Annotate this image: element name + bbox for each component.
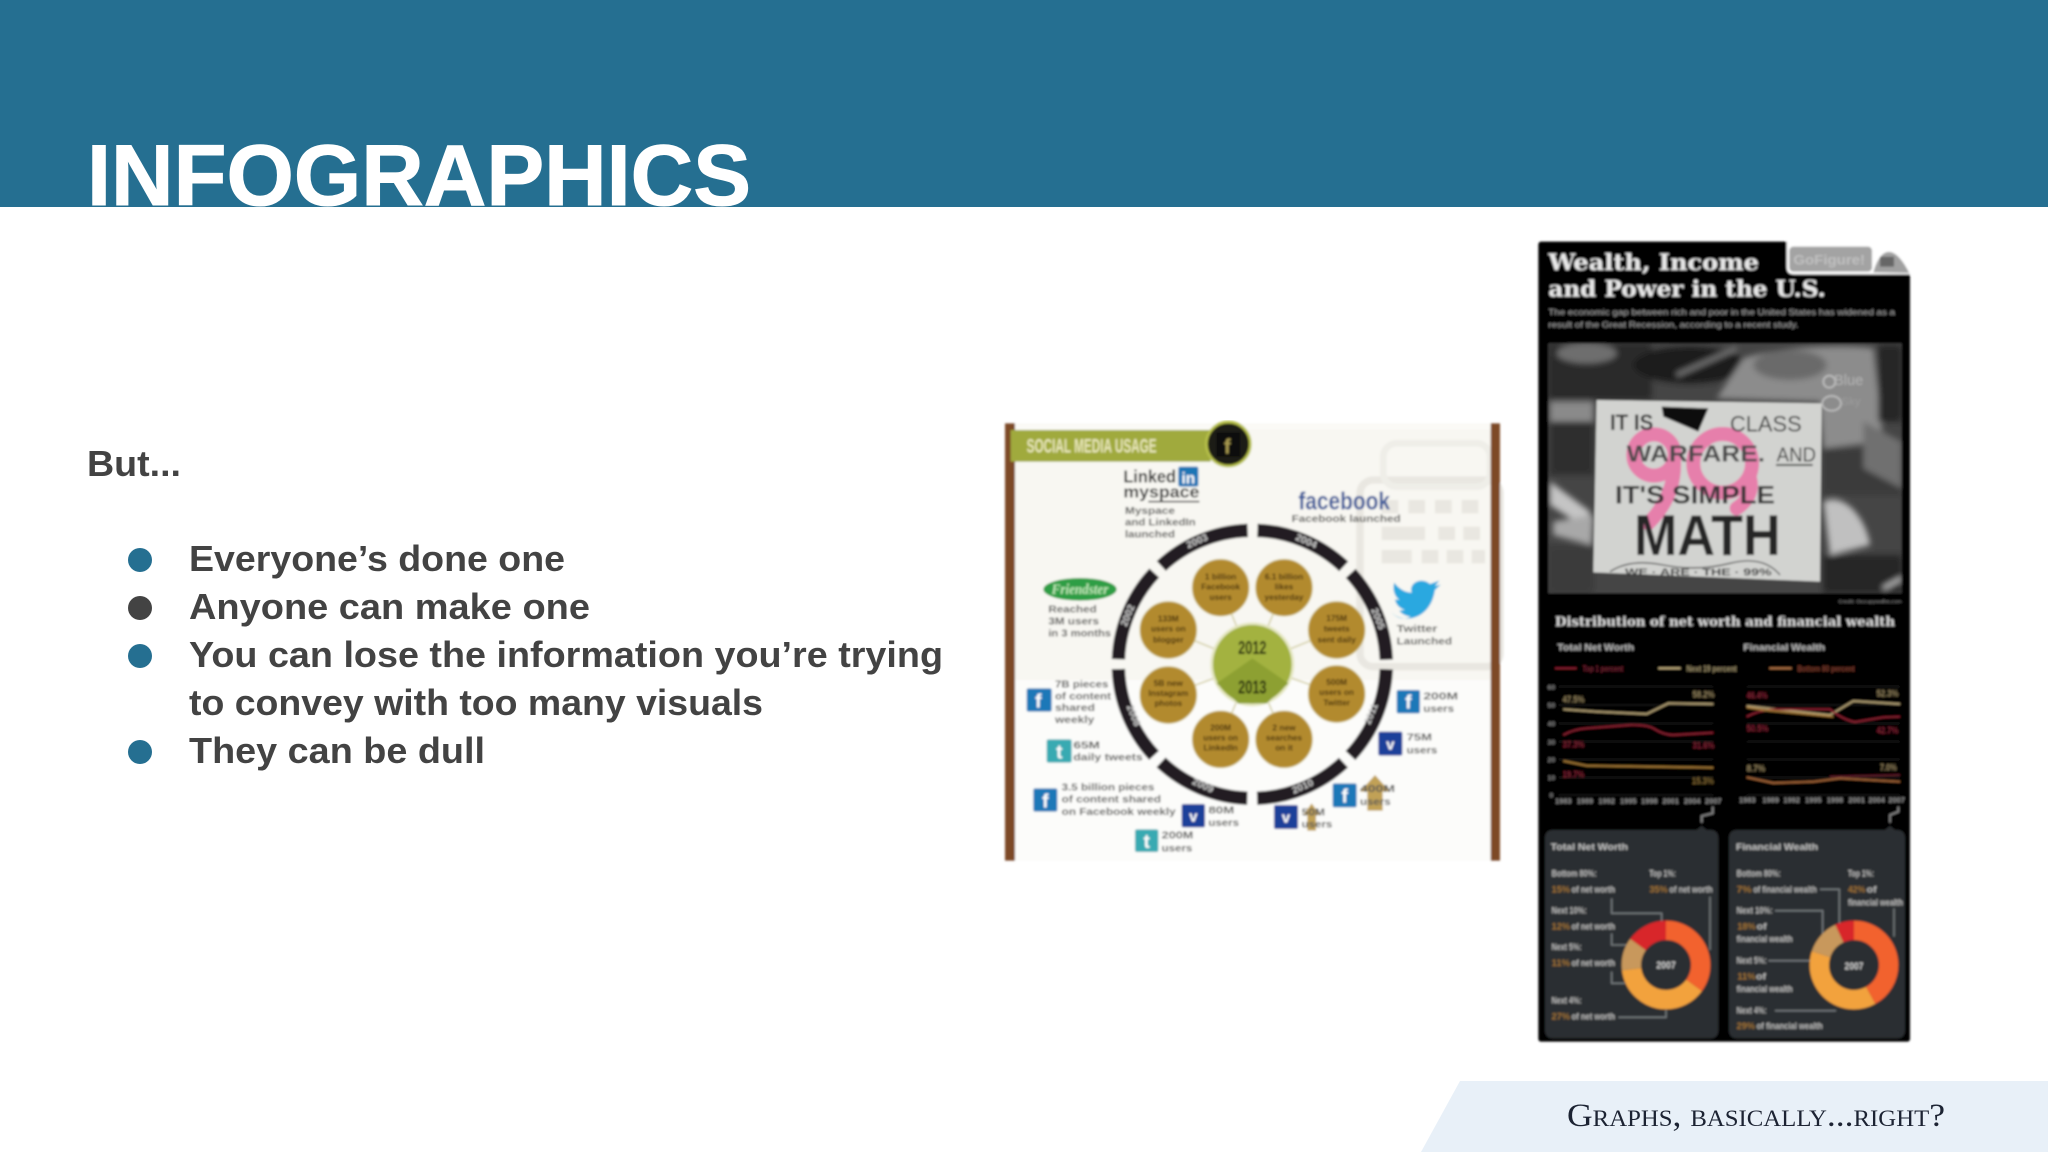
panel: total net worth: Next 4%:: [1552, 995, 1582, 1005]
panel: total net worth: [1545, 826, 1718, 1038]
banner: f: [1224, 436, 1231, 458]
panel: total net worth: Bottom 80%:: [1552, 869, 1597, 879]
line chart: financial wealth: 7.0%: [1880, 763, 1897, 773]
gold circle labels: searches: [1266, 733, 1302, 743]
logos and labels: f: [1035, 691, 1042, 712]
logos and labels: 400M: [1360, 784, 1395, 795]
title: INFOGRAPHICS: [87, 128, 751, 224]
line chart: total net worth: 2004: [1684, 796, 1701, 805]
gold circle labels: photos: [1154, 698, 1183, 708]
line chart: financial wealth: 46.4%: [1747, 690, 1768, 700]
logos and labels: 200M: [1162, 831, 1193, 842]
panel: total net worth: of net worth: [1572, 1011, 1615, 1021]
year ring: 2004: [1294, 532, 1319, 551]
intro text: [1548, 308, 1896, 329]
protest photo: [1548, 343, 1902, 593]
gold circle labels: 5B new: [1154, 678, 1183, 688]
bullet list: [128, 538, 943, 771]
logos and labels: f: [1341, 787, 1348, 808]
gold circle labels: 1 billion: [1205, 571, 1236, 581]
logos and labels: 7B pieces: [1055, 679, 1109, 690]
logos and labels: users: [1423, 704, 1454, 715]
gold circle labels: 500M: [1326, 677, 1347, 687]
chart legend: Bottom 80 percent: [1797, 664, 1855, 673]
year ring: 2009: [1190, 777, 1215, 796]
logos and labels: t: [1056, 743, 1063, 764]
line chart: total net worth: 2001: [1663, 796, 1679, 805]
top-right tab: GoFigure!: [1793, 251, 1865, 267]
gold circle labels: 2 new: [1272, 723, 1296, 733]
line chart: total net worth: 60: [1548, 684, 1555, 691]
logos and labels: shared: [1055, 703, 1095, 714]
logos and labels: Myspace: [1125, 506, 1176, 517]
panel: total net worth: of net worth: [1669, 885, 1713, 895]
gold circle labels: LinkedIn: [1204, 743, 1238, 753]
panel: financial wealth: 2007: [1845, 961, 1864, 972]
heading: and Power in the U.S.: [1548, 277, 1826, 303]
gold circle labels: users on: [1151, 624, 1186, 634]
logos and labels: v: [1386, 737, 1395, 753]
bullet list: Everyone’s done one: [189, 538, 565, 579]
line chart: total net worth: 1992: [1599, 796, 1615, 805]
logos and labels: [1027, 467, 1458, 854]
line chart: total net worth: [1548, 684, 1721, 805]
bullet list: You can lose the information you’re trying: [189, 634, 943, 675]
protest photo: IT'S SIMPLE: [1615, 481, 1775, 509]
logos and labels: launched: [1125, 529, 1175, 540]
chart headings: Financial Wealth: [1743, 643, 1825, 653]
panel: financial wealth: 42%: [1848, 885, 1866, 895]
chart legend: [1555, 664, 1855, 673]
pink 99 marks: [1633, 434, 1752, 523]
intro text: The economic gap between rich and poor in the United States has widened as a: [1548, 308, 1896, 317]
line chart: financial wealth: 8.7%: [1747, 764, 1766, 774]
section heading: Distribution of net worth and financial wealth: [1555, 614, 1895, 629]
line chart: financial wealth: 2004: [1869, 796, 1886, 805]
panel: financial wealth: financial wealth: [1737, 984, 1793, 994]
line chart: total net worth: 2007: [1705, 796, 1721, 805]
connector lines: [1168, 588, 1337, 739]
line chart: financial wealth: 50.5%: [1747, 724, 1769, 734]
year ring: 2002: [1119, 603, 1138, 628]
logos and labels: users: [1162, 843, 1193, 854]
logos and labels: myspace: [1123, 482, 1199, 501]
protest sign: [1593, 400, 1822, 582]
panel: financial wealth: Top 1%:: [1848, 869, 1874, 879]
year ring: 2010: [1291, 777, 1316, 797]
panel: financial wealth: Bottom 80%:: [1737, 869, 1781, 879]
line chart: financial wealth: 2007: [1889, 796, 1905, 805]
panel: financial wealth: 7%: [1737, 885, 1752, 895]
logos and labels: users: [1208, 818, 1239, 829]
logos and labels: v: [1189, 809, 1198, 825]
line chart: financial wealth: 1989: [1763, 796, 1779, 805]
center circle: [1212, 624, 1293, 705]
protest photo: WARFARE.: [1627, 441, 1765, 467]
panel: financial wealth: of: [1867, 885, 1878, 895]
protest photo: IT IS: [1610, 410, 1653, 435]
gold circle labels: likes: [1275, 581, 1294, 591]
header band: [0, 0, 2048, 207]
panel: financial wealth: financial wealth: [1848, 897, 1903, 907]
logos and labels: of content shared: [1062, 795, 1161, 806]
line chart: total net worth: 40: [1548, 721, 1555, 728]
panel: total net worth: 35%: [1649, 885, 1668, 895]
logos and labels: of content: [1055, 691, 1112, 702]
line chart: total net worth: 10: [1548, 775, 1555, 782]
logos and labels: Facebook launched: [1292, 514, 1401, 525]
logos and labels: 80M: [1208, 805, 1234, 816]
line chart: financial wealth: [1739, 687, 1905, 805]
gold circle labels: blogger: [1153, 634, 1184, 644]
gold circle labels: 133M: [1158, 614, 1179, 624]
text block: But and bullets: [87, 443, 943, 771]
shirt logo: Blue: [1834, 373, 1863, 389]
shirt logo: [1822, 373, 1863, 411]
logos and labels: Linked: [1123, 467, 1176, 487]
shirt logo: Sky: [1842, 396, 1861, 408]
center circle: 2013: [1238, 676, 1266, 697]
line chart: total net worth: 30: [1548, 739, 1555, 746]
panel: financial wealth: 11%: [1737, 971, 1756, 981]
line chart: total net worth: 1998: [1641, 796, 1657, 805]
logos and labels: 65M: [1073, 741, 1100, 752]
logos and labels: users: [1302, 820, 1333, 831]
line chart: financial wealth: 2001: [1849, 796, 1865, 805]
line chart: total net worth: 15.3%: [1692, 776, 1714, 786]
panel: financial wealth: 18%: [1737, 921, 1756, 931]
line chart: total net worth: 20: [1548, 757, 1555, 764]
gold circle labels: 6.1 billion: [1265, 571, 1303, 581]
line chart: total net worth: 1983: [1555, 796, 1571, 805]
logos and labels: f: [1405, 693, 1412, 714]
logos and labels: 3.5 billion pieces: [1062, 783, 1155, 794]
image: social media usage infographic: [1005, 422, 1500, 861]
panel: financial wealth: Financial Wealth: [1736, 842, 1818, 852]
logos and labels: in 3 months: [1048, 628, 1111, 639]
gold circle labels: Facebook: [1201, 581, 1240, 591]
year ring: 2008: [1124, 703, 1142, 728]
logos and labels: and LinkedIn: [1125, 517, 1196, 528]
protest photo: CLASS: [1730, 412, 1802, 437]
logos and labels: 50M: [1302, 807, 1325, 818]
panel: financial wealth: of financial wealth: [1757, 1021, 1823, 1031]
bullet list: to convey with too many visuals: [189, 682, 763, 723]
footer caption: Graphs, basically...right?: [1567, 1098, 1945, 1134]
gold circle labels: users on: [1203, 733, 1238, 743]
line chart: financial wealth: 1983: [1739, 796, 1755, 805]
logos and labels: users: [1360, 797, 1391, 808]
panel: total net worth: Next 10%:: [1552, 905, 1587, 915]
panel: total net worth: of net worth: [1572, 885, 1615, 895]
center circle: 2012: [1238, 637, 1266, 658]
gold circle labels: Twitter: [1323, 698, 1351, 708]
panel: total net worth: Top 1%:: [1649, 869, 1676, 879]
protest photo: MATH: [1634, 504, 1781, 568]
panel: financial wealth: Next 10%:: [1737, 905, 1773, 915]
chart legend: Top 1 percent: [1583, 664, 1624, 673]
panel: financial wealth: of: [1757, 921, 1768, 931]
line chart: financial wealth: 1998: [1827, 796, 1843, 805]
logos and labels: Launched: [1397, 636, 1452, 647]
panel: total net worth: Total Net Worth: [1551, 842, 1628, 852]
logos and labels: facebook: [1298, 487, 1391, 515]
panel: total net worth: Next 5%:: [1552, 942, 1582, 952]
gold circle labels: on it: [1275, 743, 1293, 753]
line chart: total net worth: 1995: [1620, 796, 1636, 805]
banner: [1011, 422, 1250, 466]
top-right tab: [1787, 238, 1913, 274]
line chart: total net worth: 58.2%: [1693, 689, 1715, 699]
bullet list: They can be dull: [189, 730, 485, 771]
logos and labels: Friendster: [1051, 582, 1109, 598]
protest photo: AND: [1777, 444, 1816, 467]
logos and labels: daily tweets: [1073, 753, 1143, 764]
gold circle labels: [1148, 571, 1356, 753]
heading: Wealth, Income: [1547, 250, 1759, 276]
intro text: result of the Great Recession, according to a recent study.: [1548, 320, 1798, 329]
line chart: total net worth: 0: [1549, 793, 1553, 800]
logos and labels: in: [1182, 470, 1195, 487]
panel: financial wealth: 29%: [1737, 1021, 1756, 1031]
image: wealth, income and power infographic: [1538, 238, 1913, 1042]
intro line: But...: [87, 443, 181, 484]
line chart: financial wealth: 42.7%: [1877, 725, 1899, 735]
line chart: total net worth: 1989: [1577, 796, 1593, 805]
banner: SOCIAL MEDIA USAGE: [1027, 437, 1157, 458]
logos and labels: 3M users: [1048, 616, 1100, 627]
line chart: total net worth: 19.7%: [1563, 770, 1585, 780]
gold circle labels: sent daily: [1317, 634, 1356, 644]
logos and labels: weekly: [1054, 715, 1095, 726]
logos and labels: f: [1042, 791, 1049, 812]
gold circle labels: yesterday: [1265, 592, 1304, 602]
logos and labels: Twitter: [1397, 624, 1437, 635]
panel: financial wealth: of financial wealth: [1753, 885, 1817, 895]
heading: [1547, 250, 1826, 303]
panel: financial wealth: Next 5%:: [1737, 955, 1767, 965]
year ring: 2011: [1363, 702, 1381, 726]
connectors: [1702, 807, 1898, 823]
panel: total net worth: 15%: [1552, 885, 1571, 895]
panel: total net worth: of net worth: [1572, 958, 1615, 968]
logos and labels: v: [1282, 811, 1291, 827]
line chart: financial wealth: 52.3%: [1877, 689, 1899, 699]
protest photo: WE · ARE · THE · 99%: [1625, 568, 1772, 579]
logos and labels: t: [1143, 832, 1150, 853]
panel: financial wealth: Next 4%:: [1737, 1005, 1767, 1015]
gold stat circles: [1140, 559, 1365, 768]
panel: total net worth: of net worth: [1572, 921, 1615, 931]
chart headings: [1557, 643, 1825, 653]
line chart: total net worth: 47.5%: [1563, 695, 1585, 705]
gold circle labels: tweets: [1324, 624, 1350, 634]
gold circle labels: users on: [1319, 687, 1354, 697]
keyboard backdrop: [1360, 443, 1500, 667]
logos and labels: users: [1407, 745, 1438, 756]
panel: financial wealth: [1729, 826, 1905, 1038]
line chart: financial wealth: 1992: [1784, 796, 1800, 805]
line chart: total net worth: 31.6%: [1693, 740, 1715, 750]
logos and labels: 75M: [1407, 733, 1432, 744]
year ring: 2005: [1368, 607, 1387, 632]
gold circle labels: Instagram: [1148, 688, 1188, 698]
panel: financial wealth: financial wealth: [1737, 934, 1793, 944]
panel: total net worth: 11%: [1552, 958, 1571, 968]
logos and labels: Reached: [1048, 605, 1097, 616]
chart legend: Next 19 percent: [1687, 664, 1737, 673]
panel: total net worth: 12%: [1552, 921, 1571, 931]
photo credit: Credit: Occupywallst.com: [1838, 599, 1902, 604]
year ring: [1118, 530, 1387, 798]
logos and labels: 200M: [1423, 691, 1458, 702]
panel: total net worth: 2007: [1656, 960, 1676, 971]
year ring: 2003: [1185, 532, 1210, 551]
line chart: total net worth: 50: [1548, 703, 1555, 710]
bullet list: Anyone can make one: [189, 586, 590, 627]
logos and labels: on Facebook weekly: [1062, 807, 1176, 818]
panel: total net worth: 27%: [1552, 1011, 1571, 1021]
line chart: total net worth: 37.3%: [1563, 739, 1585, 749]
chart headings: Total Net Worth: [1557, 643, 1634, 653]
gold circle labels: 175M: [1326, 613, 1347, 623]
gold circle labels: users: [1210, 592, 1232, 602]
line chart: financial wealth: 1995: [1805, 796, 1821, 805]
gold circle labels: 200M: [1210, 723, 1231, 733]
panel: financial wealth: of: [1756, 971, 1767, 981]
footer tab: [1421, 1081, 2048, 1152]
